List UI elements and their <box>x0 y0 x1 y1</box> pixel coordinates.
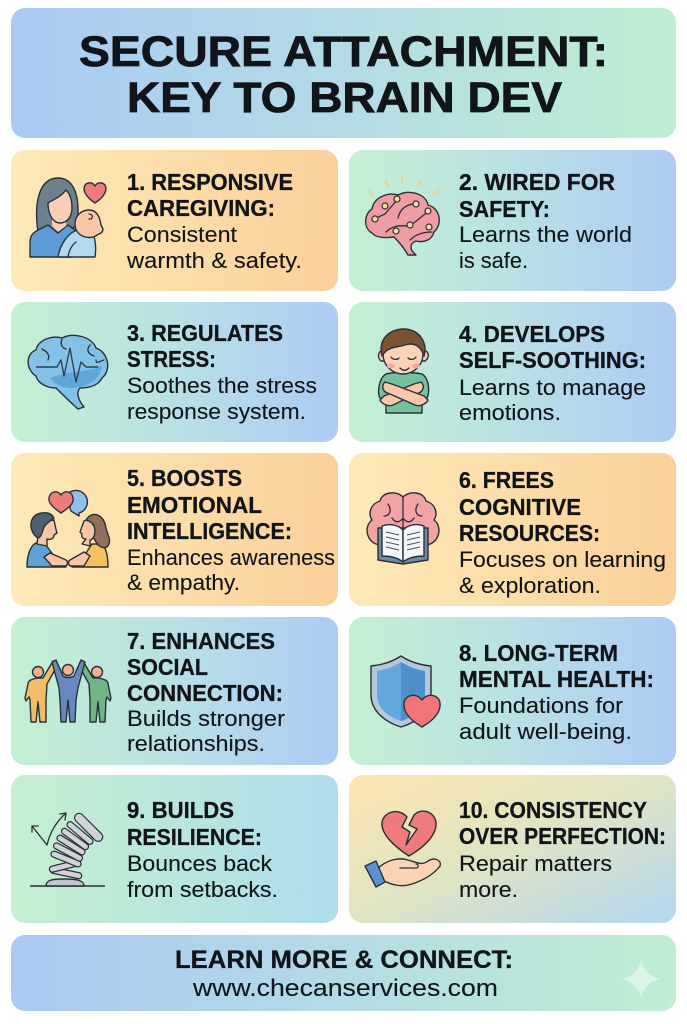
text: regulates stress: response system. <box>127 399 306 424</box>
icon: shield with heart <box>371 656 440 727</box>
text: cognitive resources <box>459 467 666 598</box>
text: cognitive resources: & exploration. <box>459 573 601 598</box>
text: cognitive resources: COGNITIVE <box>459 494 581 520</box>
text: mental health <box>459 640 654 744</box>
text: regulates stress: Soothes the stress <box>127 373 317 398</box>
footer text: www.checanservices.com <box>192 975 498 1002</box>
panel: 10 consistency over perfection <box>349 775 676 923</box>
footer banner <box>11 935 676 1011</box>
panel: 8 long-term mental health <box>349 617 676 765</box>
title text: SECURE ATTACHMENT: <box>79 28 608 76</box>
panel: 1 responsive caregiving <box>11 150 338 291</box>
text: resilience: Bounces back <box>127 851 273 876</box>
text: caregiving: 1. RESPONSIVE <box>127 169 293 195</box>
icon: blue brain with heartbeat line <box>28 335 108 409</box>
text: social connection <box>127 628 286 756</box>
panel: 7 enhances social connection <box>11 617 338 765</box>
text: caregiving: warmth & safety. <box>126 248 302 273</box>
panel: 9 builds resilience <box>11 775 338 923</box>
text: emotional intelligence: 5. BOOSTS <box>127 465 242 491</box>
text: regulates stress <box>127 320 317 424</box>
text: wired for safety: 2. WIRED FOR <box>459 169 615 195</box>
footer text: LEARN MORE & CONNECT: <box>175 946 513 974</box>
text: social connection: CONNECTION: <box>127 680 283 706</box>
panel: 5 boosts emotional intelligence <box>11 453 338 606</box>
text: wired for safety <box>459 169 632 273</box>
icon: bouncing spring with arrows <box>30 811 105 886</box>
panel: 2 wired for safety <box>349 150 676 291</box>
text: resilience: from setbacks. <box>127 877 278 902</box>
icon: sparkle <box>622 960 660 998</box>
icon: brain with glowing network <box>366 177 439 255</box>
title text <box>79 28 608 122</box>
text: mental health: Foundations for <box>459 693 624 718</box>
icon: broken heart over open hand <box>365 811 440 887</box>
text: mental health: 8. LONG-TERM <box>459 640 618 666</box>
text: wired for safety: SAFETY: <box>459 196 550 222</box>
text: consistency: Repair matters <box>459 851 612 876</box>
text: wired for safety: is safe. <box>459 248 528 273</box>
text: resilience: 9. BUILDS <box>127 797 234 823</box>
text: regulates stress: 3. REGULATES <box>127 320 283 346</box>
text: caregiving: CAREGIVING: <box>127 195 275 221</box>
footer text <box>175 946 513 1002</box>
panel: 3 regulates stress <box>11 302 338 442</box>
text: self-soothing: SELF-SOOTHING: <box>459 347 646 373</box>
text: consistency <box>459 797 666 902</box>
text: wired for safety: Learns the world <box>459 222 632 247</box>
text: consistency: more. <box>459 877 518 902</box>
text: emotional intelligence: INTELLIGENCE: <box>127 518 292 544</box>
text: regulates stress: STRESS: <box>127 346 216 372</box>
text: emotional intelligence: Enhances awareness <box>127 545 335 570</box>
text: social connection: 7. ENHANCES <box>127 628 275 654</box>
panel: 6 frees cognitive resources <box>349 453 676 606</box>
text: social connection: SOCIAL <box>127 654 208 680</box>
text: consistency: 10. CONSISTENCY <box>459 797 647 823</box>
text: cognitive resources: 6. FREES <box>459 467 554 493</box>
text: caregiving: Consistent <box>127 222 238 247</box>
text: self-soothing: Learns to manage <box>459 375 646 400</box>
panel: 4 develops self-soothing <box>349 302 676 442</box>
text: consistency: OVER PERFECTION: <box>459 823 666 849</box>
icon: three people raising hands together <box>25 660 111 722</box>
text: mental health: MENTAL HEALTH: <box>459 666 654 692</box>
text: emotional intelligence: & empathy. <box>127 570 240 595</box>
icon: two people holding hands with speech bubbles <box>27 490 110 567</box>
text: self-soothing: emotions. <box>459 400 561 425</box>
title text: KEY TO BRAIN DEV <box>127 74 562 122</box>
text: resilience: RESILIENCE: <box>127 824 262 850</box>
title banner <box>11 8 676 138</box>
text: caregiving <box>126 169 302 273</box>
text: emotional intelligence: EMOTIONAL <box>127 492 262 518</box>
text: cognitive resources: Focuses on learning <box>459 547 666 572</box>
text: social connection: Builds stronger <box>127 706 286 731</box>
icon: child hugging self <box>379 329 429 413</box>
text: emotional intelligence <box>127 465 335 595</box>
text: social connection: relationships. <box>127 731 265 756</box>
text: self-soothing: 4. DEVELOPS <box>459 321 605 347</box>
text: mental health: adult well-being. <box>459 719 632 744</box>
icon: brain with open book <box>367 493 439 564</box>
icon: mother holding baby with heart <box>30 178 106 257</box>
text: cognitive resources: RESOURCES: <box>459 520 600 546</box>
text: self-soothing <box>459 321 646 425</box>
text: resilience <box>127 797 278 902</box>
